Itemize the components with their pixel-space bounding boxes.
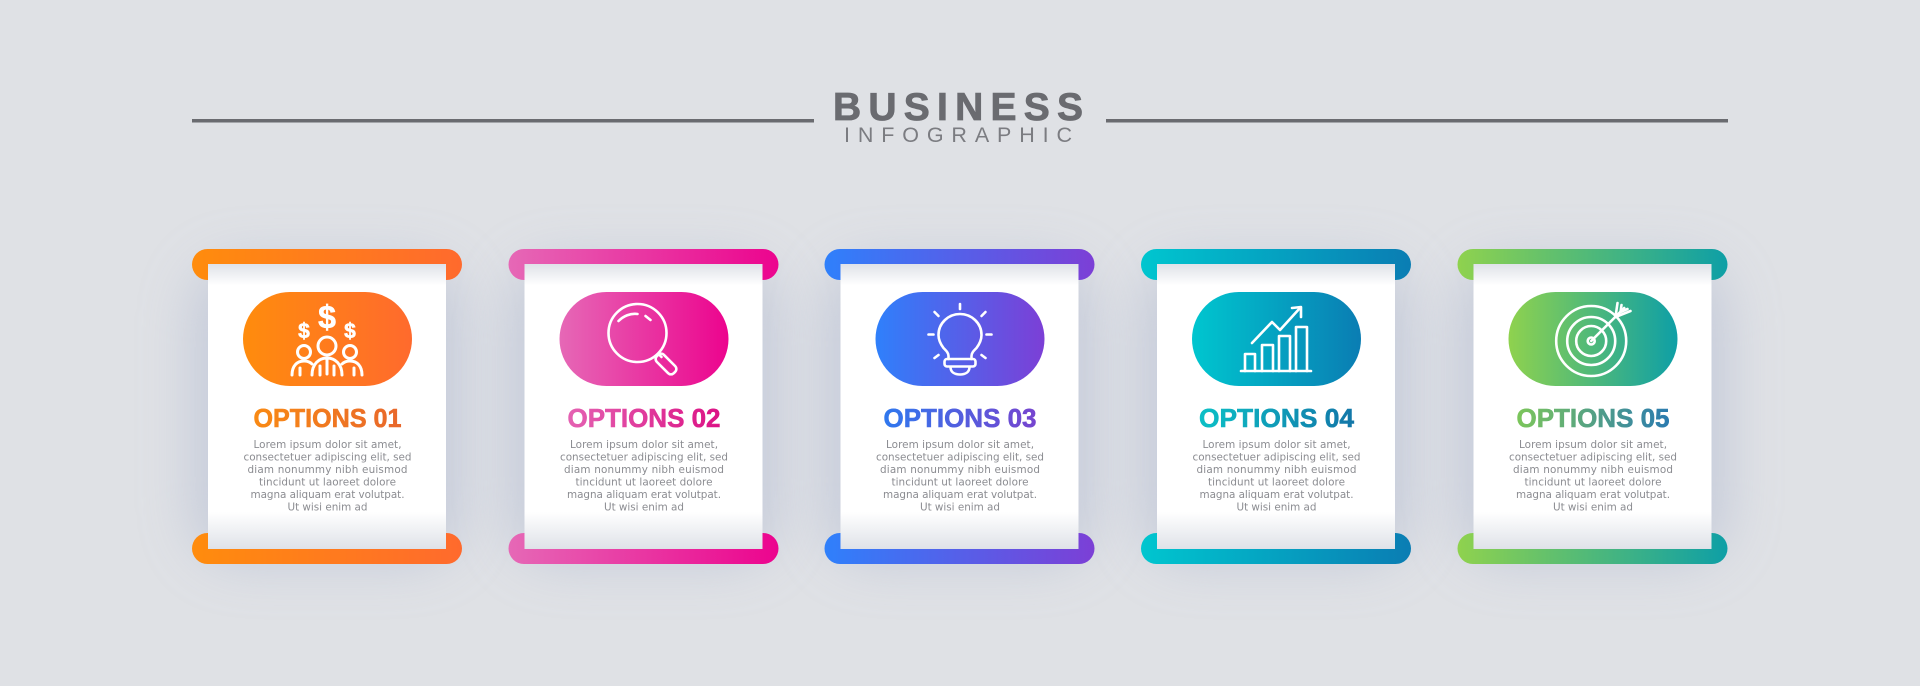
body text: Ut wisi enim ad (1236, 502, 1316, 514)
body text: magna aliquam erat volutpat. (250, 489, 404, 501)
panel shadow (508, 262, 778, 562)
top bar (1141, 249, 1411, 280)
icon: people and dollars: $ (298, 320, 310, 343)
body text: consectetuer adipiscing elit, sed (876, 452, 1044, 464)
body text: consectetuer adipiscing elit, sed (560, 452, 728, 464)
body text: tincidunt ut laoreet dolore (259, 476, 396, 488)
panel: options 02 (508, 249, 778, 564)
panel shadow (824, 262, 1094, 562)
bottom bar (1141, 533, 1411, 564)
icon: light bulb (928, 304, 992, 374)
body text (560, 439, 728, 514)
white sheet (1474, 264, 1712, 549)
heading: OPTIONS 03 (884, 403, 1036, 433)
body text: diam nonummy nibh euismod (1513, 464, 1673, 476)
title rule left (192, 119, 814, 122)
icon: target with arrow (1556, 303, 1630, 376)
body text: magna aliquam erat volutpat. (567, 489, 721, 501)
subtitle: INFOGRAPHIC: INFOGRAPHIC (844, 123, 1072, 147)
body text: Lorem ipsum dolor sit amet, (886, 439, 1034, 451)
icon pill (560, 292, 728, 386)
body text: consectetuer adipiscing elit, sed (1192, 452, 1360, 464)
bottom bar (192, 533, 462, 564)
body text: diam nonummy nibh euismod (880, 464, 1040, 476)
panel: options 01 (192, 249, 462, 564)
heading: OPTIONS 02 (568, 403, 720, 433)
title: BUSINESS: BUSINESS (833, 86, 1083, 129)
body text: Lorem ipsum dolor sit amet, (1202, 439, 1350, 451)
heading: OPTIONS 01 (254, 403, 402, 433)
panel: options 05 (1458, 249, 1728, 564)
white sheet (1157, 264, 1395, 549)
icon pill (243, 292, 412, 386)
body text: diam nonummy nibh euismod (564, 464, 724, 476)
panel shadow (192, 262, 462, 562)
body text: tincidunt ut laoreet dolore (892, 476, 1028, 488)
title rule right (1106, 119, 1728, 122)
body text (244, 439, 412, 514)
body text: consectetuer adipiscing elit, sed (244, 452, 412, 464)
body text (876, 439, 1044, 514)
body text: consectetuer adipiscing elit, sed (1509, 452, 1677, 464)
top bar (508, 249, 778, 280)
body text: Lorem ipsum dolor sit amet, (1519, 439, 1667, 451)
icon: people and dollars (292, 299, 362, 375)
icon: people and dollars: $ (344, 320, 356, 343)
body text: magna aliquam erat volutpat. (1200, 489, 1354, 501)
white sheet (840, 264, 1078, 549)
body text: Ut wisi enim ad (604, 502, 684, 514)
icon: people and dollars: $ (318, 299, 336, 335)
panel: options 03 (824, 249, 1094, 564)
white sheet (208, 264, 446, 549)
white sheet (524, 264, 762, 549)
body text: Ut wisi enim ad (1553, 502, 1633, 514)
icon pill (1192, 292, 1361, 386)
body text: Ut wisi enim ad (288, 502, 368, 514)
panel shadow (1141, 262, 1411, 562)
body text (1192, 439, 1360, 514)
body text: Ut wisi enim ad (920, 502, 1000, 514)
body text: diam nonummy nibh euismod (1196, 464, 1356, 476)
panel shadow (1458, 262, 1728, 562)
body text (1509, 439, 1677, 514)
body text: magna aliquam erat volutpat. (883, 489, 1037, 501)
top bar (1458, 249, 1728, 280)
body text: tincidunt ut laoreet dolore (576, 476, 712, 488)
panel: options 04 (1141, 249, 1411, 564)
heading: OPTIONS 05 (1516, 403, 1670, 433)
bottom bar (508, 533, 778, 564)
bottom bar (1458, 533, 1728, 564)
icon: magnifying glass (608, 304, 678, 376)
icon: growth chart (1241, 307, 1311, 371)
body text: diam nonummy nibh euismod (248, 464, 408, 476)
heading: OPTIONS 04 (1199, 403, 1355, 433)
top bar (192, 249, 462, 280)
body text: tincidunt ut laoreet dolore (1524, 476, 1662, 488)
body text: Lorem ipsum dolor sit amet, (254, 439, 402, 451)
body text: magna aliquam erat volutpat. (1516, 489, 1670, 501)
icon pill (876, 292, 1044, 386)
body text: Lorem ipsum dolor sit amet, (570, 439, 718, 451)
body text: tincidunt ut laoreet dolore (1208, 476, 1345, 488)
icon pill (1508, 292, 1678, 386)
title block (192, 86, 1728, 147)
bottom bar (824, 533, 1094, 564)
top bar (824, 249, 1094, 280)
